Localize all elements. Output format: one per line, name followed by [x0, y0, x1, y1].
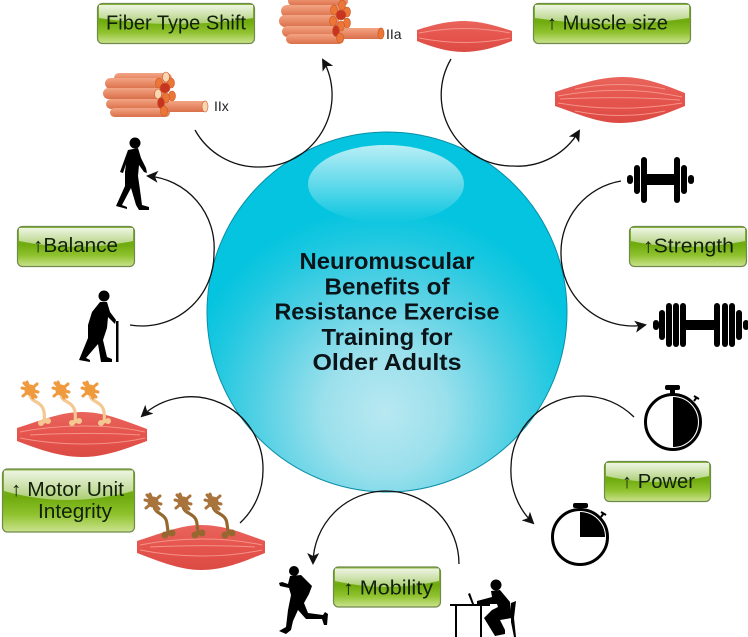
label: Muscle size: ↑ Muscle size	[547, 12, 668, 34]
label: Fiber Type Shift: Fiber Type Shift	[106, 12, 246, 34]
icon: person at desk	[450, 580, 516, 637]
icon: fiber bundle IIx	[103, 72, 229, 117]
icon: large muscle	[555, 77, 685, 123]
neurons	[154, 505, 228, 534]
label: Motor Unit Integrity: ↑ Motor Unit	[11, 479, 124, 501]
label: Strength: ↑Strength	[643, 236, 734, 258]
label: Strength	[630, 226, 746, 266]
title: Resistance Exercise	[274, 298, 500, 324]
label: Motor Unit Integrity: Integrity	[38, 501, 112, 523]
label: Mobility: ↑ Mobility	[343, 578, 433, 600]
neurons	[30, 394, 104, 422]
title: Training for	[322, 324, 453, 350]
icon: small dumbbell	[627, 157, 694, 203]
icon: healthy motor unit	[17, 382, 147, 457]
label: Fiber Type Shift	[98, 4, 254, 44]
title: Older Adults	[312, 349, 462, 375]
label: Motor Unit Integrity	[2, 469, 134, 532]
arrow: mobility	[313, 491, 459, 564]
label: Balance	[18, 226, 134, 266]
icon: stopwatch quarter	[552, 503, 608, 564]
title: Benefits of	[324, 273, 450, 299]
label: Muscle size	[534, 4, 690, 44]
label: Mobility	[334, 567, 440, 607]
fiber label IIa: IIa	[386, 26, 402, 42]
arrow: power	[511, 396, 634, 523]
title: Neuromuscular	[300, 248, 475, 274]
icon: elderly person with cane	[79, 290, 118, 362]
icon: fiber bundle IIa	[279, 0, 402, 44]
label: Power: ↑ Power	[622, 471, 695, 493]
icon: walking person	[116, 138, 149, 210]
fiber label IIx: IIx	[214, 98, 229, 114]
icon: large dumbbell	[653, 303, 748, 347]
icon: running person	[279, 566, 328, 634]
icon: degraded motor unit	[137, 494, 265, 570]
label: Balance: ↑Balance	[33, 235, 118, 257]
label: Power	[604, 462, 710, 502]
title	[274, 248, 500, 375]
arrow: strength	[561, 181, 645, 326]
central sphere	[207, 132, 567, 492]
sphere gloss highlight	[308, 145, 464, 223]
arrow: motor unit	[142, 397, 263, 523]
arrow: muscle size	[441, 59, 579, 166]
icon: small muscle	[417, 21, 512, 52]
arrow: balance	[130, 176, 214, 326]
arrow: fiber type IIx to IIa	[195, 60, 332, 167]
icon: stopwatch half	[646, 385, 700, 450]
